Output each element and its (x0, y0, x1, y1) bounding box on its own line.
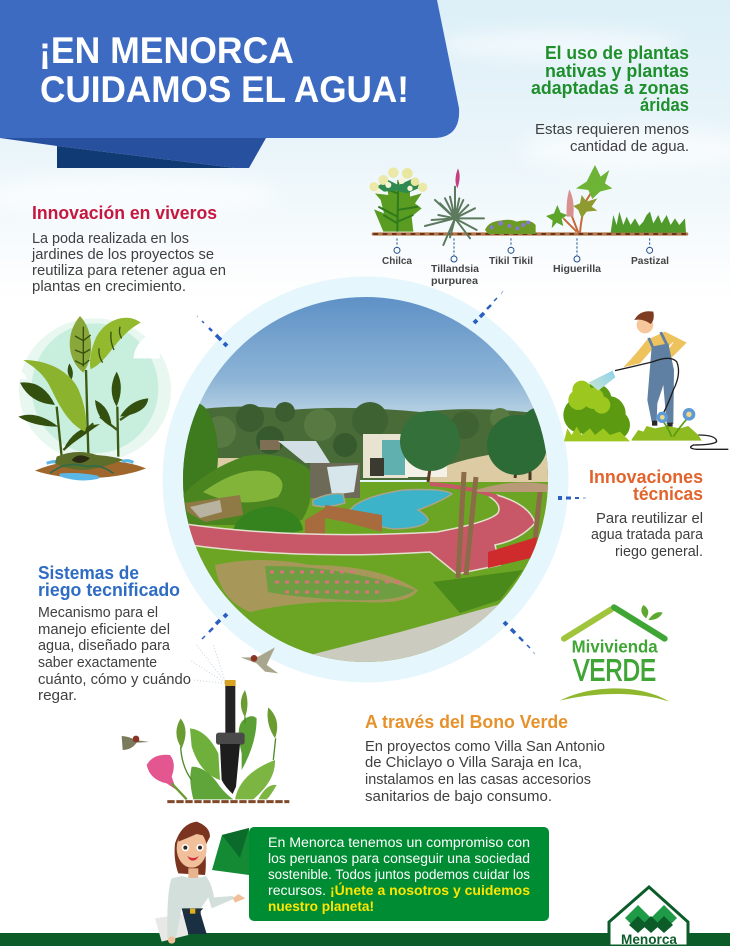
logo: Menorca (609, 887, 688, 946)
character: woman presenter (155, 822, 245, 944)
heading: irrigation: riego tecnificado (38, 580, 180, 600)
central photo with ring (162, 276, 568, 682)
photo: waterfall (260, 440, 360, 498)
heading: nursery: Innovación en viveros (32, 203, 217, 223)
spray (190, 645, 225, 683)
icon: sprinkler with plants and hummingbirds (122, 645, 289, 802)
callout text: ¡Únete a nosotros y cuidemos (330, 883, 530, 898)
text: Bono Verde: instalamos en las casas accesorios (365, 772, 591, 788)
icon: chilca (369, 167, 427, 232)
text: irrigation: manejo eficiente del (38, 622, 170, 638)
callout text: los peruanos para conseguir una sociedad (268, 851, 530, 866)
text: native plants: Estas requieren menos (535, 122, 689, 138)
marker: chilca (394, 238, 400, 253)
title banner (0, 0, 459, 168)
connector: bottom right (504, 622, 535, 654)
flowers (657, 408, 695, 437)
logo: Mivivienda Verde (560, 605, 669, 702)
icon: tikil tikil (485, 220, 536, 234)
marker: tillandsia (451, 238, 457, 262)
photo: pergola (458, 472, 550, 578)
title text: ¡EN MENORCA (39, 30, 294, 71)
plant name labels: Pastizal (631, 255, 669, 267)
panel: technical innovations text (589, 467, 704, 560)
panel: Bono Verde text (365, 712, 605, 805)
photo: sidewalk (313, 604, 498, 662)
text: technical innovations: agua tratada para (591, 527, 704, 543)
text: native plants: cantidad de agua. (570, 139, 689, 155)
photo: left tree (183, 404, 218, 498)
panel: plant row (369, 165, 687, 287)
text: nursery: plantas en crecimiento. (32, 279, 186, 295)
text: Bono Verde: En proyectos como Villa San Antonio (365, 739, 605, 755)
photo: tree (400, 411, 460, 482)
man (623, 311, 687, 427)
callout text: recursos. (268, 883, 326, 898)
callout text: En Menorca tenemos un compromiso con (268, 835, 530, 850)
plant name labels: Higuerilla (553, 263, 601, 275)
photo: hill (183, 455, 311, 525)
connector: top right (474, 291, 503, 323)
photo: bench (488, 537, 537, 568)
ground (167, 797, 289, 806)
photo: hedges near pool (305, 505, 382, 537)
text: technical innovations: riego general. (615, 544, 703, 560)
heading: technical innovations: técnicas (633, 484, 703, 504)
text: Bono Verde: de Chiclayo o Villa Saraja en Ica, (365, 755, 582, 771)
icon: higuerilla (546, 165, 612, 233)
text: nursery: jardines de los proyectos se (31, 247, 214, 263)
logo: Mivivienda Verde: Mivivienda (572, 637, 658, 657)
bottom bar (0, 933, 730, 946)
plant name labels: Tikil Tikil (489, 255, 533, 267)
text: irrigation: regar. (38, 688, 77, 704)
icon: pastizal (611, 212, 686, 233)
connector: right (558, 496, 586, 500)
text: technical innovations: Para reutilizar el (596, 511, 703, 527)
text: irrigation: Mecanismo para el (38, 605, 158, 621)
panel: irrigation text (38, 563, 191, 704)
heading: native plants: áridas (640, 95, 689, 115)
heading: technical innovations: Innovaciones (589, 467, 703, 487)
photo: concrete planter (185, 495, 243, 522)
photo: lawn shadow (433, 570, 523, 613)
plant name labels: Tillandsia (431, 263, 479, 275)
heading: native plants: adaptadas a zonas (531, 78, 689, 98)
ground plants (632, 426, 702, 441)
text: irrigation: cuánto, cómo y cuándo (38, 672, 191, 688)
plant name labels: Chilca (382, 255, 412, 267)
photo: lawn base (175, 482, 555, 672)
connector: top left (197, 316, 227, 346)
leaves (176, 690, 277, 799)
photo: sand (200, 450, 550, 510)
panel: native plants text (531, 43, 689, 155)
photo: background trees (180, 402, 550, 480)
photo: building (363, 434, 447, 478)
plant name labels: purpurea (431, 275, 478, 287)
icon: nursery plant (5, 316, 171, 479)
text: nursery: reutiliza para retener agua en (32, 263, 226, 279)
heading: irrigation: Sistemas de (38, 563, 139, 583)
sprinkler (216, 680, 245, 794)
heading: native plants: nativas y plantas (545, 61, 689, 81)
marker: pastizal (647, 238, 653, 253)
callout text: sostenible. Todos juntos podemos cuidar los (268, 867, 530, 882)
text: irrigation: agua, diseñado para (38, 638, 171, 654)
text: irrigation: saber exactamente (38, 655, 157, 671)
connector: bottom left (202, 614, 227, 639)
hummingbird right (241, 647, 278, 673)
text: Bono Verde: sanitarios de bajo consumo. (365, 789, 552, 805)
photo: red path (185, 495, 535, 574)
callout: commitment (212, 827, 549, 921)
heading: Bono Verde: A través del Bono Verde (365, 712, 568, 732)
marker: higuerilla (574, 238, 580, 262)
photo: tree right (487, 408, 546, 480)
photo: flower bed (215, 560, 418, 612)
callout text: nuestro planeta! (268, 899, 374, 914)
icon: tillandsia (425, 168, 484, 245)
heading: native plants: El uso de plantas (545, 43, 689, 63)
marker: tikil tikil (508, 238, 514, 253)
photo: pool (313, 490, 452, 529)
photo: hedge (233, 506, 303, 534)
panel: nursery text (31, 203, 226, 295)
hummingbird left (122, 736, 149, 750)
calla flower (147, 755, 187, 799)
icon: ground strip (373, 229, 687, 239)
logo: Mivivienda Verde: VERDE (573, 654, 656, 688)
hose (615, 358, 728, 449)
icon: gardener watering (563, 311, 728, 449)
text: nursery: La poda realizada en los (32, 231, 189, 247)
title text: CUIDAMOS EL AGUA! (40, 69, 409, 110)
bush (563, 371, 630, 441)
